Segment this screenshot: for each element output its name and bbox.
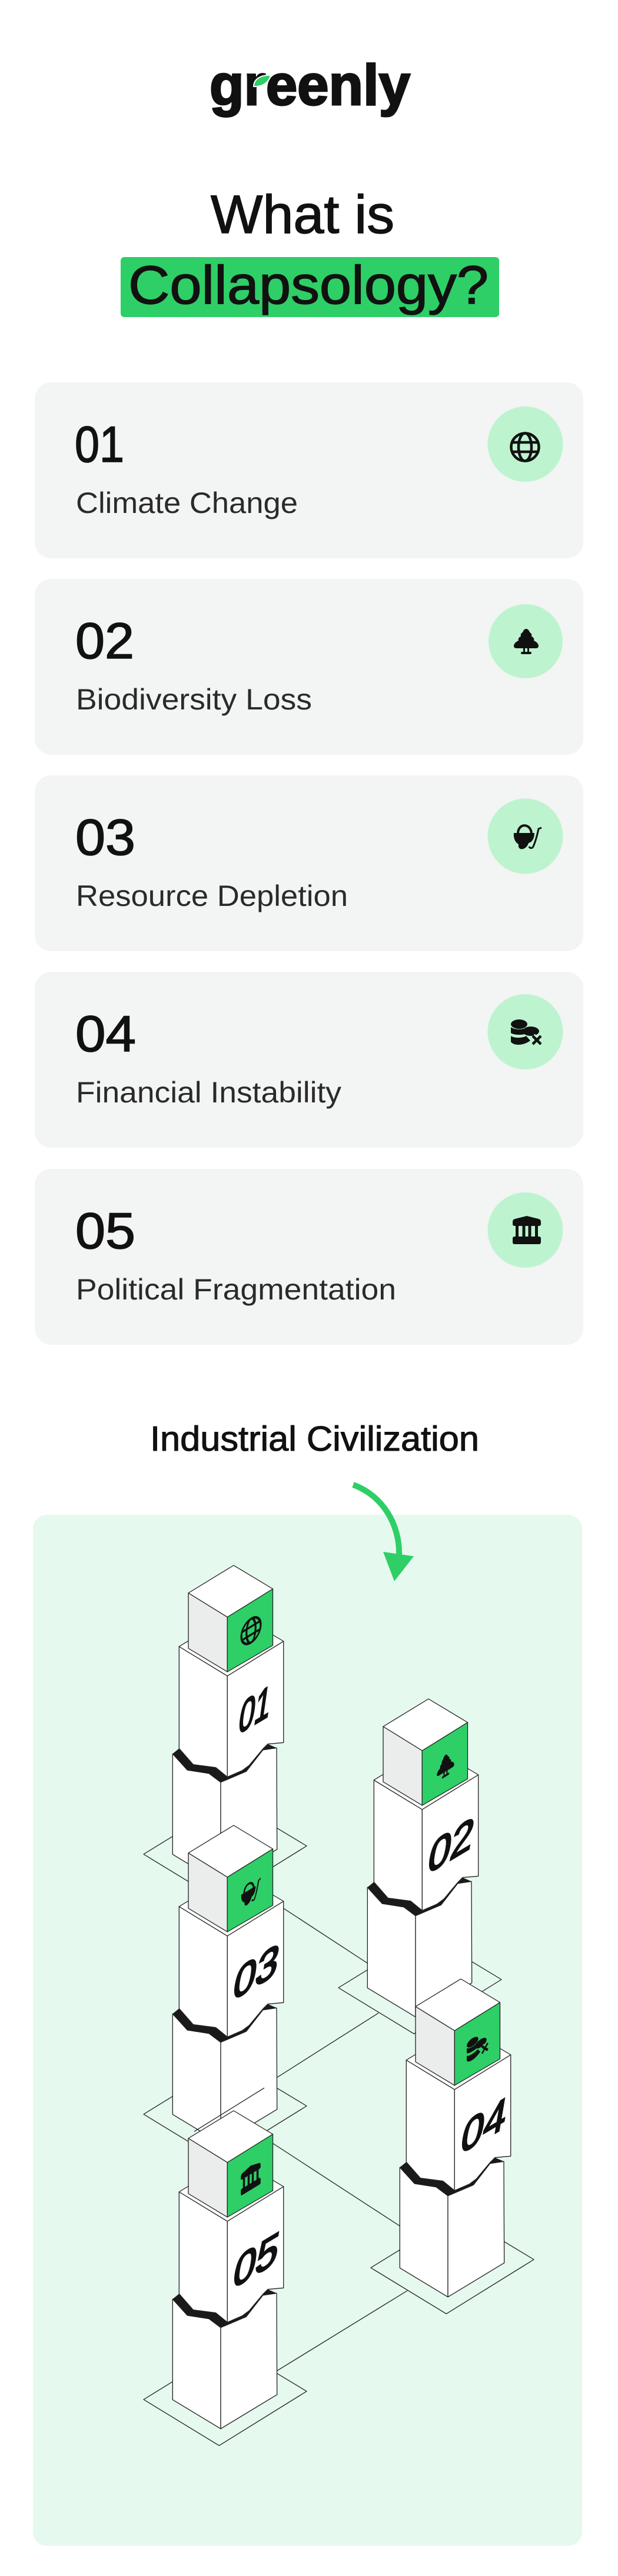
number 02: 02 (424, 1806, 478, 1885)
tower 02 (338, 1699, 501, 2034)
panel: card 04 Financial Instability (35, 972, 583, 1148)
number 03: 03 (230, 1932, 283, 2012)
line crossing tower 03 (194, 2088, 264, 2131)
title: Collapsology highlighted: Collapsology? (128, 255, 489, 315)
logo: greenly: greenly (210, 53, 410, 117)
icon: wheelbarrow (241, 1877, 261, 1909)
tower 03 (144, 1825, 307, 2160)
panel: card 04 Financial Instability: 04 (75, 1006, 136, 1062)
panel: card 05 Political Fragmentation (35, 1169, 583, 1345)
icon: coins with cross (467, 2029, 488, 2064)
panel: card 03 Resource Depletion: Resource Depletion (76, 879, 348, 912)
panel: illustration background (33, 1515, 582, 2546)
tower 05 (144, 2111, 307, 2445)
panel: card 02 Biodiversity Loss: Biodiversity Loss (76, 683, 312, 716)
panel: card 02 Biodiversity Loss (35, 579, 583, 755)
panel: card 01 Climate Change (35, 382, 583, 558)
arrow: curved green arrow (353, 1485, 414, 1581)
panel: card 05 Political Fragmentation: 05 (75, 1203, 135, 1259)
icon: tree (437, 1749, 454, 1782)
panel: card 03 Resource Depletion (35, 775, 583, 951)
icon: bank building (241, 2160, 261, 2196)
panel: card 03 Resource Depletion: 03 (75, 809, 135, 866)
heading: Industrial Civilization: Industrial Civilization (150, 1419, 479, 1458)
connecting lines between towers (259, 1894, 407, 2382)
tower 04 (371, 1979, 534, 2314)
panel: card 01 Climate Change: 01 (75, 416, 124, 473)
panel: card 05 Political Fragmentation: Political Fragmentation (76, 1273, 396, 1306)
panel: card 01 Climate Change: Climate Change (76, 486, 298, 519)
number 04: 04 (457, 2086, 511, 2165)
number 05: 05 (230, 2221, 283, 2300)
panel: card 02 Biodiversity Loss: 02 (75, 613, 134, 669)
tower 01 (144, 1565, 307, 1900)
title: What is: What is (211, 185, 394, 245)
panel: card 04 Financial Instability: Financial Instability (76, 1076, 341, 1109)
number 01: 01 (235, 1674, 274, 1745)
icon: globe (241, 1613, 261, 1648)
